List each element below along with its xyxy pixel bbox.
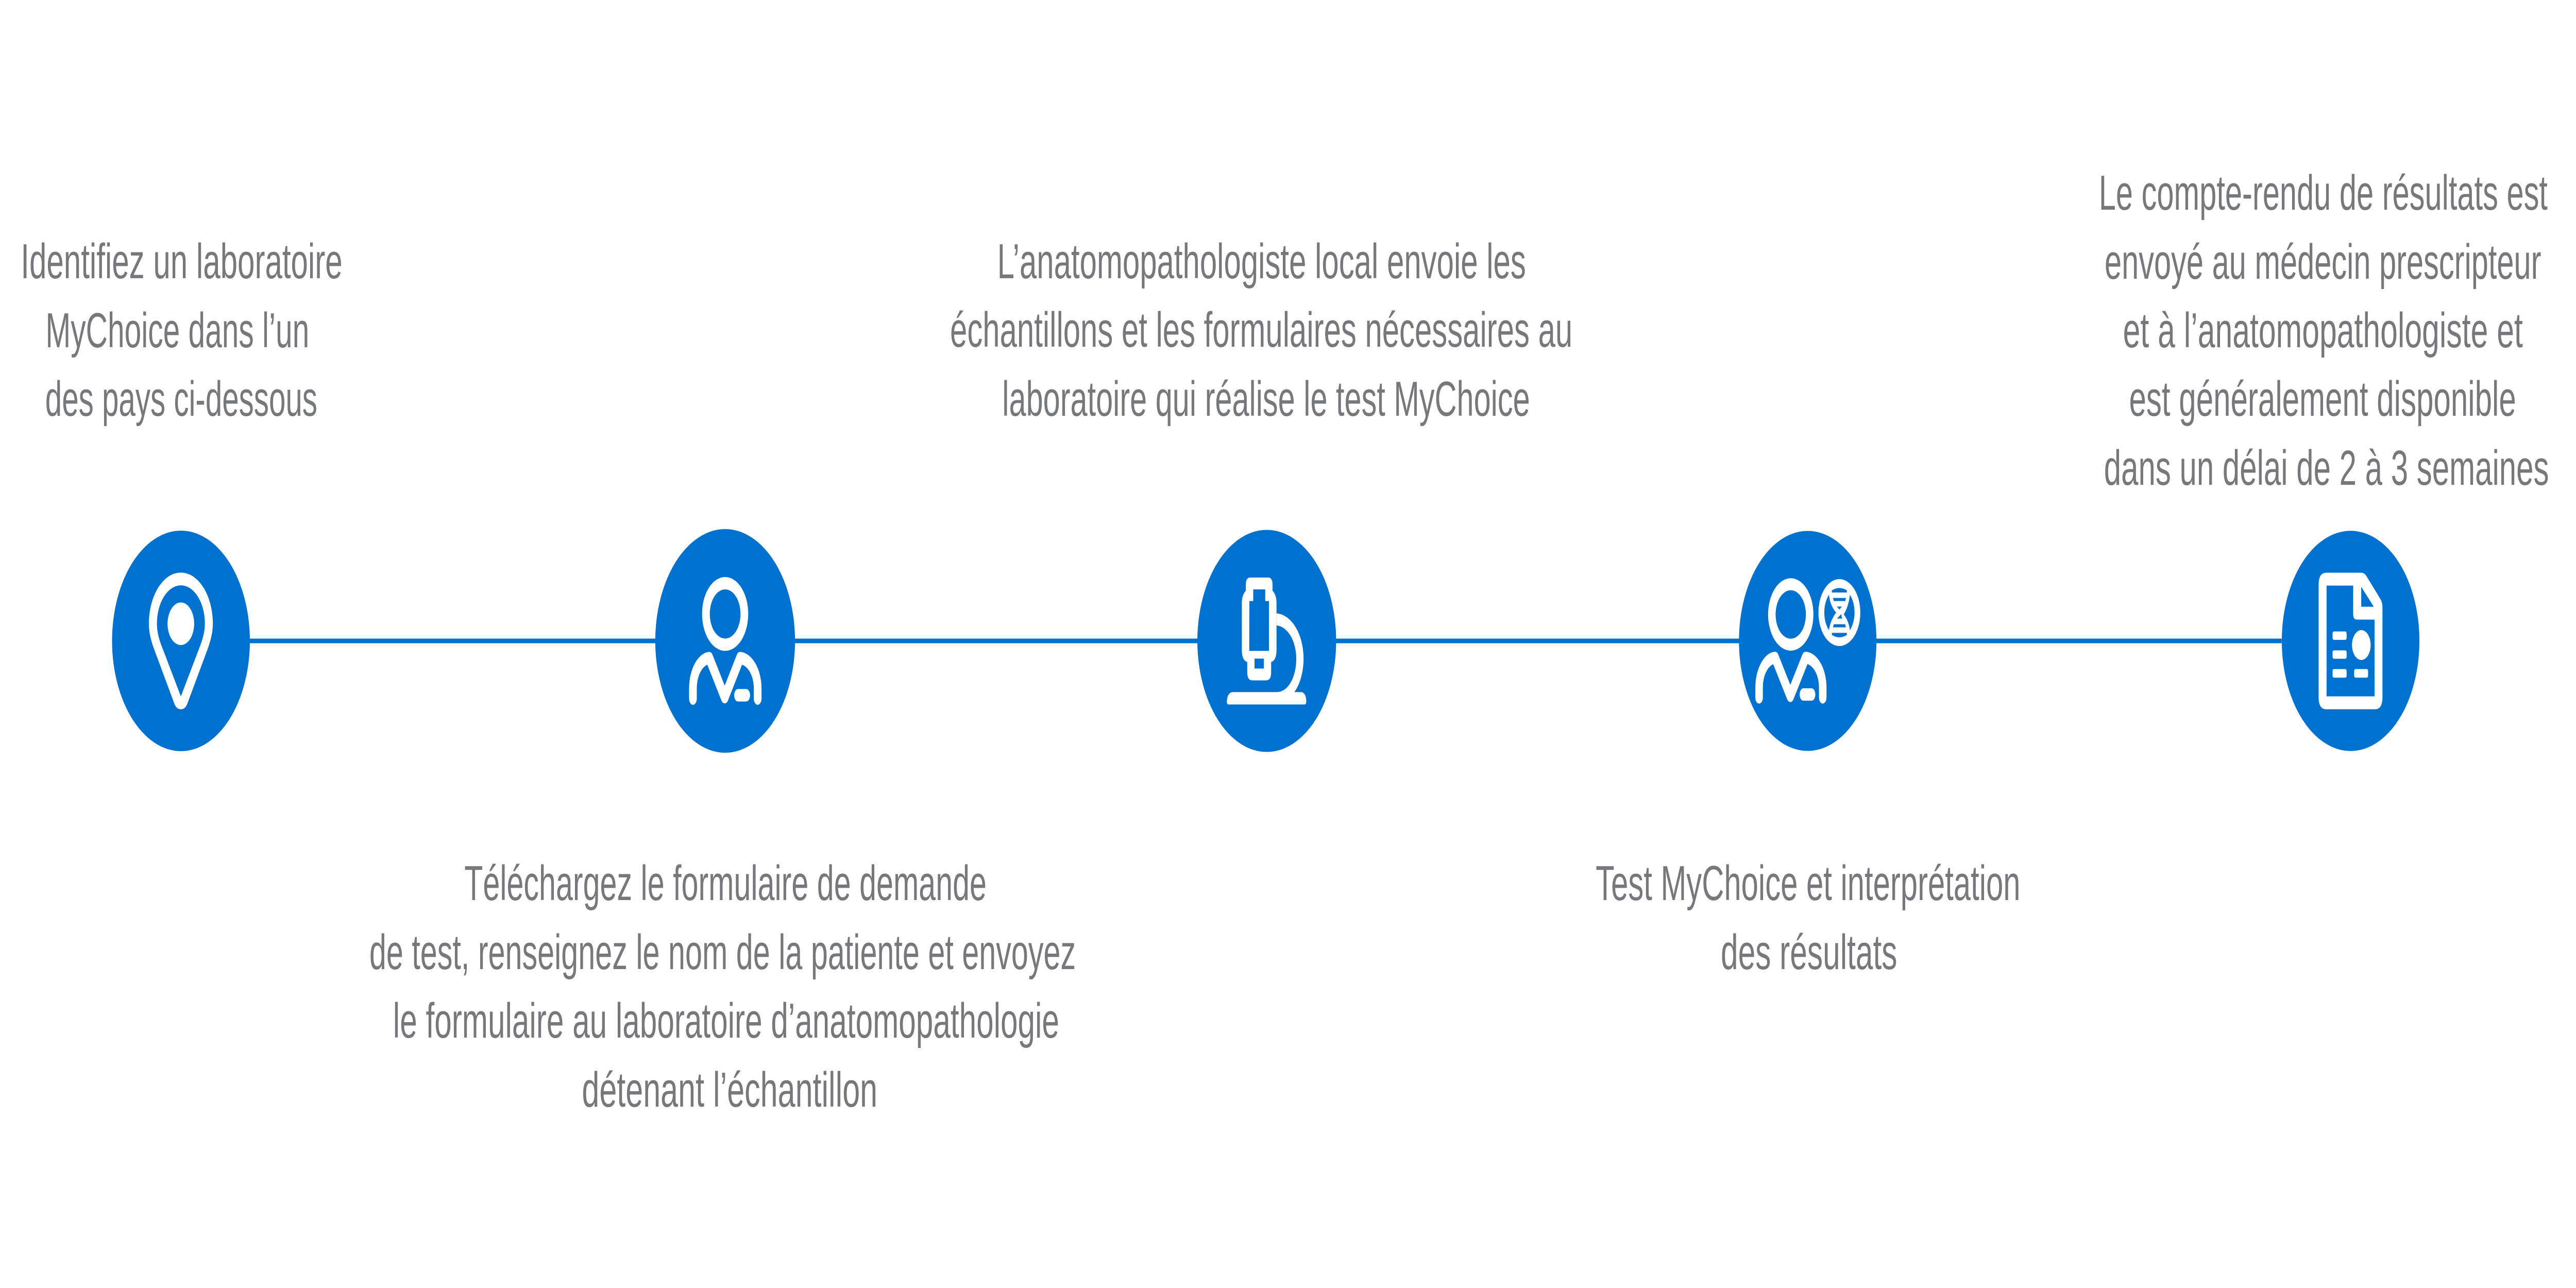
step 2: text: Téléchargez le formulaire de demande bbox=[464, 856, 987, 910]
connector line bbox=[250, 639, 2282, 643]
step 1: text: Identifiez un laboratoire bbox=[21, 234, 343, 289]
step 2: text: de test, renseignez le nom de la patiente et envoyez bbox=[369, 925, 1076, 979]
step 5: text: Le compte-rendu de résultats est bbox=[2099, 165, 2548, 220]
step 3: text: L’anatomopathologiste local envoie les bbox=[997, 234, 1526, 289]
step 4: text bbox=[1596, 856, 2021, 979]
step 2: text bbox=[369, 856, 1076, 1117]
step 2: icon person bbox=[655, 529, 795, 753]
step 3: text bbox=[950, 234, 1572, 426]
step 4: icon person with DNA bbox=[1739, 531, 1876, 751]
step 3: text: échantillons et les formulaires nécessaires au bbox=[950, 302, 1572, 357]
step 2: text: détenant l’échantillon bbox=[582, 1062, 877, 1117]
step 5: text: et à l’anatomopathologiste et bbox=[2123, 303, 2523, 358]
step 2: text: le formulaire au laboratoire d’anatomopathologie bbox=[393, 993, 1059, 1048]
step 1: text: MyChoice dans l’un bbox=[45, 303, 309, 358]
step 1: icon location pin bbox=[112, 531, 250, 751]
step 5: text: dans un délai de 2 à 3 semaines bbox=[2104, 440, 2549, 495]
step 3: text: laboratoire qui réalise le test MyChoice bbox=[1002, 371, 1530, 426]
step 4: text: des résultats bbox=[1721, 925, 1897, 979]
step 5: text bbox=[2099, 165, 2549, 495]
step 5: text: envoyé au médecin prescripteur bbox=[2105, 234, 2541, 289]
step 1: text: des pays ci-dessous bbox=[45, 371, 317, 426]
step 4: text: Test MyChoice et interprétation bbox=[1596, 856, 2021, 910]
step 5: text: est généralement disponible bbox=[2129, 371, 2516, 426]
step 5: icon report document bbox=[2282, 531, 2419, 751]
step 3: icon microscope bbox=[1197, 530, 1336, 752]
step 1: text bbox=[21, 234, 343, 426]
